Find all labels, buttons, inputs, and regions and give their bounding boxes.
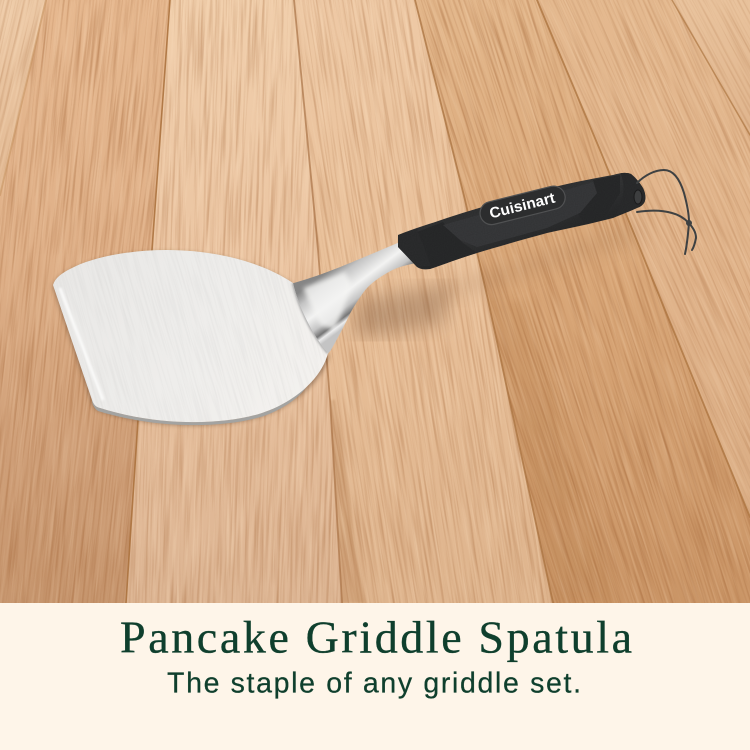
subtitle: The staple of any griddle set. xyxy=(167,668,581,700)
plank 1 xyxy=(0,0,46,190)
cord eyelet xyxy=(634,190,642,204)
title: Pancake Griddle Spatula xyxy=(120,612,632,662)
rubber section near neck xyxy=(417,222,477,269)
plank 7 xyxy=(673,0,750,128)
plank 6 xyxy=(538,0,750,514)
handle grip xyxy=(398,172,646,270)
brand logo: Cuisinart xyxy=(488,190,557,222)
rubber section near cap xyxy=(594,175,620,196)
spatula blade xyxy=(53,250,328,422)
neck collar xyxy=(398,234,417,267)
spatula xyxy=(53,169,697,426)
spatula blade edge xyxy=(92,385,308,425)
end cap xyxy=(620,172,646,212)
blade brushed finish xyxy=(59,282,328,400)
plank 5 xyxy=(420,0,750,603)
caption panel xyxy=(0,603,750,750)
plank 2 xyxy=(0,0,169,603)
plank 3 xyxy=(128,0,341,603)
spatula neck xyxy=(290,242,417,356)
center panel xyxy=(444,196,594,246)
hanging cord xyxy=(637,170,696,254)
neck highlight xyxy=(303,272,352,330)
cast shadows of spatula xyxy=(53,225,640,425)
plank 4 xyxy=(295,0,552,603)
logo badge xyxy=(478,184,568,227)
